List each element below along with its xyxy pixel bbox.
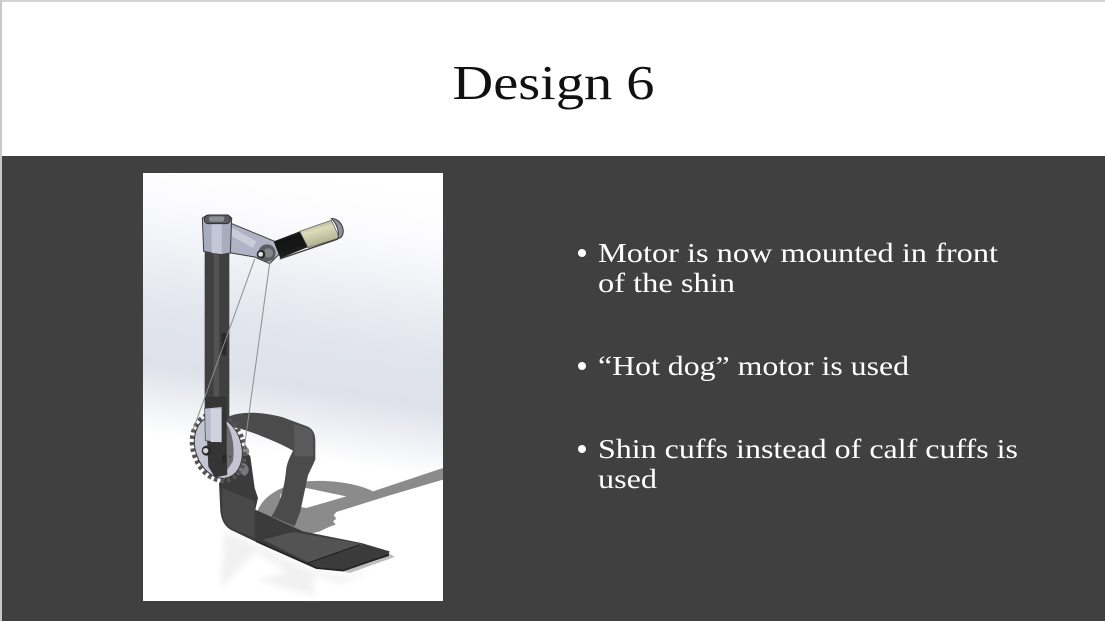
- bullet: hot dog motor: “Hot dog” motor is used: [598, 350, 909, 381]
- bullet: shin cuffs: Shin cuffs instead of calf cuffs is: [598, 433, 1018, 464]
- lower aluminum collar: [205, 407, 222, 443]
- bullet: motor position: Motor is now mounted in front: [598, 237, 998, 268]
- motor: khaki section: [300, 220, 340, 248]
- sprocket teeth: [185, 408, 252, 487]
- bullet: shin cuffs: [578, 433, 1018, 494]
- shank post: [205, 251, 229, 468]
- gear at arm end: [258, 244, 276, 262]
- foot plate shadow edge: [343, 554, 395, 573]
- post over sprocket: [205, 397, 227, 477]
- bullet: motor position: [578, 237, 998, 298]
- sprocket window: [226, 423, 234, 472]
- panel: dark content area: [2, 156, 1105, 621]
- motor arm: [221, 223, 280, 264]
- ankle strap: [229, 413, 315, 526]
- pivot hub: [202, 446, 212, 456]
- bullet list: [578, 237, 1018, 494]
- bullet: motor position: of the shin: [598, 267, 735, 298]
- motor end cap: [331, 219, 343, 238]
- bullet: shin cuffs: used: [598, 463, 657, 494]
- panel: design render image: [143, 173, 443, 601]
- cast shadow: [256, 468, 443, 536]
- cables: [193, 259, 270, 450]
- upper part of exoskeleton: post, arm, motor, cables: [202, 215, 343, 468]
- lower part of exoskeleton: shadow, strap, foot plate: [219, 413, 443, 596]
- title: Design 6: [452, 55, 654, 110]
- heel and foot plate: [219, 448, 390, 571]
- sprocket disc: [187, 410, 250, 485]
- sprocket and lower post collar: [185, 397, 252, 487]
- motor: black section: [274, 231, 308, 258]
- post top collar: [202, 215, 232, 255]
- ankle joint hub: [235, 463, 249, 476]
